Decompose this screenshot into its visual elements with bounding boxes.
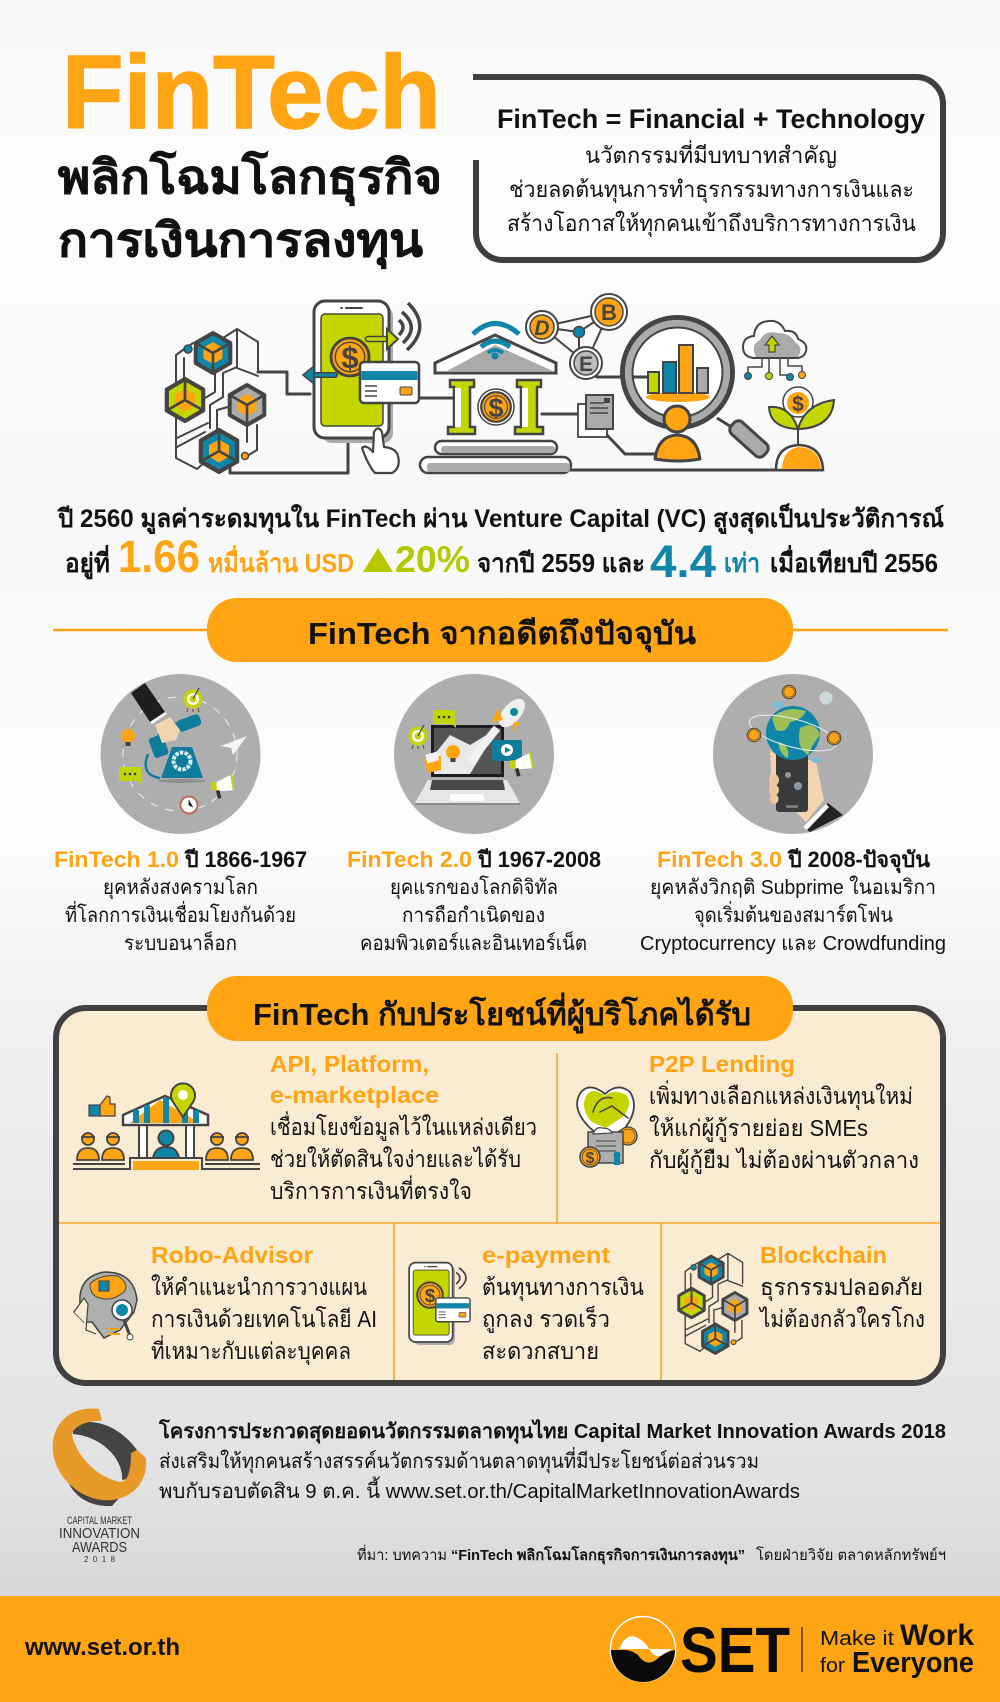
text: e-payment: e-payment: [482, 1242, 610, 1268]
SET logo: Make it: [820, 1628, 895, 1650]
caption: FinTech 3.0: [640, 847, 946, 955]
source note: ที่มา: บทความ: [357, 1544, 447, 1564]
title: การเงินการลงทุน: [58, 214, 424, 269]
awards text: โครงการประกวดสุดยอดนวัตกรรมตลาดทุนไทย Capital Market Innovation Awards 2018: [158, 1418, 946, 1444]
benefit: Blockchain: [672, 1242, 925, 1357]
caption: FinTech 2.0: FinTech 2.0: [347, 847, 472, 872]
definition box: FinTech = Financial + Technology: [497, 104, 925, 134]
text: API platform: ช่วยให้ตัดสินใจง่ายและได้รับ: [270, 1146, 521, 1172]
hero illustration: fintech network: [158, 294, 834, 477]
text: Robo-Advisor: ให้คำแนะนำการวางแผน: [151, 1274, 367, 1300]
icon: smartphone payment: [303, 301, 420, 443]
icon: handshake certificate: [577, 1087, 637, 1167]
caption: FinTech 3.0: จุดเริ่มต้นของสมาร์ตโฟน: [694, 901, 893, 928]
text: API platform: เชื่อมโยงข้อมูลไว้ในแหล่งเดียว: [270, 1111, 537, 1141]
icon: magnifier with bar chart: [622, 318, 771, 460]
SET logo: Work: [900, 1619, 974, 1652]
text: e-payment: ต้นทุนทางการเงิน: [482, 1274, 644, 1301]
text: P2P lending: P2P Lending: [649, 1051, 795, 1077]
caption: FinTech 1.0: [54, 847, 307, 955]
section heading: benefits: FinTech กับประโยชน์ที่ผู้บริโภคได้รับ: [253, 992, 751, 1034]
statistic text: อยู่ที่: [65, 544, 110, 580]
icon: crypto coins network: E: [579, 353, 593, 376]
statistic text: 4.4: [650, 536, 716, 587]
definition box: สร้างโอกาสให้ทุกคนเข้าถึงบริการทางการเงิน: [507, 210, 916, 237]
SET logo: [610, 1614, 974, 1686]
caption: FinTech 2.0: การถือกำเนิดของ: [402, 904, 545, 927]
icon: laptop circle: [394, 674, 554, 834]
icon: phone with card: [409, 1263, 470, 1345]
source note: โดยฝ่ายวิจัย ตลาดหลักทรัพย์ฯ: [756, 1546, 946, 1564]
text: API platform: [270, 1051, 537, 1204]
text: P2P lending: ให้แก่ผู้กู้รายย่อย SMEs: [649, 1115, 868, 1142]
source note: [357, 1544, 946, 1565]
caption: FinTech 3.0: FinTech 3.0: [657, 847, 782, 872]
text: Robo-Advisor: [151, 1242, 377, 1365]
icon: telephone circle: [100, 674, 260, 834]
text: API platform: API, Platform,: [270, 1051, 429, 1077]
icon: phone with card: $: [425, 1285, 436, 1306]
benefit: P2P lending: [577, 1051, 919, 1174]
awards logo: AWARDS: [72, 1539, 127, 1556]
caption: FinTech 3.0: Cryptocurrency และ Crowdfunding: [640, 932, 946, 955]
caption: FinTech 1.0: ปี 1866-1967: [184, 847, 307, 872]
icon: handshake certificate: $: [586, 1150, 595, 1167]
text: P2P lending: กับผู้กู้ยืม ไม่ต้องผ่านตัวกลาง: [649, 1147, 919, 1174]
awards logo: 2018: [84, 1555, 116, 1564]
title: FinTech: [62, 35, 441, 151]
icon: bank with wifi: [420, 324, 571, 473]
text: API platform: บริการการเงินที่ตรงใจ: [270, 1175, 472, 1204]
definition box: [473, 77, 943, 260]
caption: FinTech 1.0: FinTech 1.0: [54, 847, 179, 872]
icon: person: [655, 406, 700, 461]
statistic text: ปี 2560 มูลค่าระดมทุนใน FinTech ผ่าน Venture Capital (VC) สูงสุดเป็นประวัติการณ์: [56, 503, 944, 535]
caption: FinTech 2.0: คอมพิวเตอร์และอินเทอร์เน็ต: [360, 929, 587, 955]
footer band: www.set.or.th: [24, 1634, 180, 1661]
statistic text: เท่า: [724, 548, 760, 578]
icon: smartphone payment: $: [341, 340, 359, 375]
benefit: Robo-Advisor: [74, 1242, 377, 1365]
caption: FinTech 2.0: ปี 1967-2008: [477, 847, 601, 872]
icon: cloud upload: [743, 321, 806, 380]
text: e-payment: ถูกลง รวดเร็ว: [482, 1304, 610, 1333]
era 1: FinTech 1.0: [54, 674, 307, 955]
text: Blockchain: Blockchain: [760, 1242, 887, 1268]
awards logo: INNOVATION: [59, 1525, 140, 1542]
icon: robot head: [74, 1272, 137, 1340]
text: P2P lending: [649, 1051, 919, 1174]
icon: pointing hand: [362, 428, 399, 473]
icon: money plant: [769, 387, 834, 470]
footer band: [0, 1596, 1000, 1702]
SET logo: for: [820, 1655, 845, 1677]
icon: crypto coins network: D: [534, 317, 550, 340]
icon: bank with wifi: $: [488, 393, 504, 423]
text: Robo-Advisor: ที่เหมาะกับแต่ละบุคคล: [151, 1335, 351, 1365]
caption: FinTech 3.0: ปี 2008-ปัจจุบัน: [787, 847, 930, 874]
awards logo: CAPITAL MARKET: [67, 1515, 132, 1527]
statistic text: 20%: [395, 539, 470, 580]
statistic text: [56, 503, 944, 587]
caption: FinTech 1.0: ระบบอนาล็อก: [124, 929, 237, 955]
icon: money plant: $: [792, 393, 804, 416]
text: Blockchain: ไม่ต้องกลัวใครโกง: [758, 1306, 925, 1332]
text: API platform: e-marketplace: [270, 1082, 439, 1108]
source note: “FinTech พลิกโฉมโลกธุรกิจการเงินการลงทุน”: [451, 1545, 745, 1565]
benefit: API platform: [73, 1051, 537, 1204]
title: [58, 35, 442, 269]
text: Robo-Advisor: Robo-Advisor: [151, 1242, 313, 1268]
icon: blockchain cubes: [158, 329, 264, 477]
icon: document: [578, 395, 613, 437]
era 3: FinTech 3.0: [640, 674, 946, 955]
caption: FinTech 2.0: ยุคแรกของโลกดิจิทัล: [390, 875, 558, 900]
awards text: ส่งเสริมให้ทุกคนสร้างสรรค์นวัตกรรมด้านตลาดทุนที่มีประโยชน์ต่อส่วนรวม: [159, 1447, 759, 1474]
SET logo: Everyone: [852, 1647, 974, 1679]
statistic text: หมื่นล้าน USD: [208, 544, 354, 578]
awards text: [158, 1418, 946, 1503]
caption: FinTech 1.0: ยุคหลังสงครามโลก: [103, 875, 258, 900]
statistic text: เมื่อเทียบปี 2556: [770, 544, 938, 578]
definition box: ช่วยลดต้นทุนการทำธุรกรรมทางการเงินและ: [509, 177, 914, 203]
text: e-payment: สะดวกสบาย: [482, 1338, 599, 1364]
statistic text: จากปี 2559 และ: [477, 548, 645, 578]
section heading: benefits: [207, 976, 793, 1041]
caption: FinTech 1.0: ที่โลกการเงินเชื่อมโยงกันด้วย: [65, 901, 296, 927]
icon: crypto coins network: [526, 294, 627, 379]
section heading: history: FinTech จากอดีตถึงปัจจุบัน: [308, 616, 696, 653]
section heading: history: [53, 598, 948, 662]
awards text: พบกับรอบตัดสิน 9 ต.ค. นี้ www.set.or.th/CapitalMarketInnovationAwards: [159, 1476, 800, 1503]
caption: FinTech 3.0: ยุคหลังวิกฤติ Subprime ในอเมริกา: [650, 875, 936, 900]
text: Blockchain: ธุรกรรมปลอดภัย: [760, 1274, 923, 1301]
connector lines: [230, 372, 822, 473]
benefit: e-payment: [409, 1242, 644, 1364]
SET logo: SET: [680, 1614, 790, 1686]
text: Blockchain: [758, 1242, 925, 1332]
awards logo: [53, 1408, 146, 1564]
icon: globe on smartphone circle: [713, 674, 873, 834]
era 2: FinTech 2.0: [347, 674, 601, 955]
text: e-payment: [482, 1242, 644, 1364]
icon: crypto coins network: B: [601, 300, 617, 325]
icon: blockchain cubes: [672, 1253, 747, 1357]
text: P2P lending: เพิ่มทางเลือกแหล่งเงินทุนใหม่: [649, 1080, 913, 1110]
title: พลิกโฉมโลกธุรกิจ: [58, 150, 442, 206]
text: Robo-Advisor: การเงินด้วยเทคโนโลยี AI: [151, 1306, 377, 1332]
caption: FinTech 2.0: [347, 847, 601, 955]
panel: consumer benefits: [56, 976, 943, 1383]
definition box: นวัตกรรมที่มีบทบาทสำคัญ: [585, 139, 837, 168]
statistic text: 1.66: [118, 531, 200, 582]
icon: bank and customers: [73, 1083, 260, 1170]
